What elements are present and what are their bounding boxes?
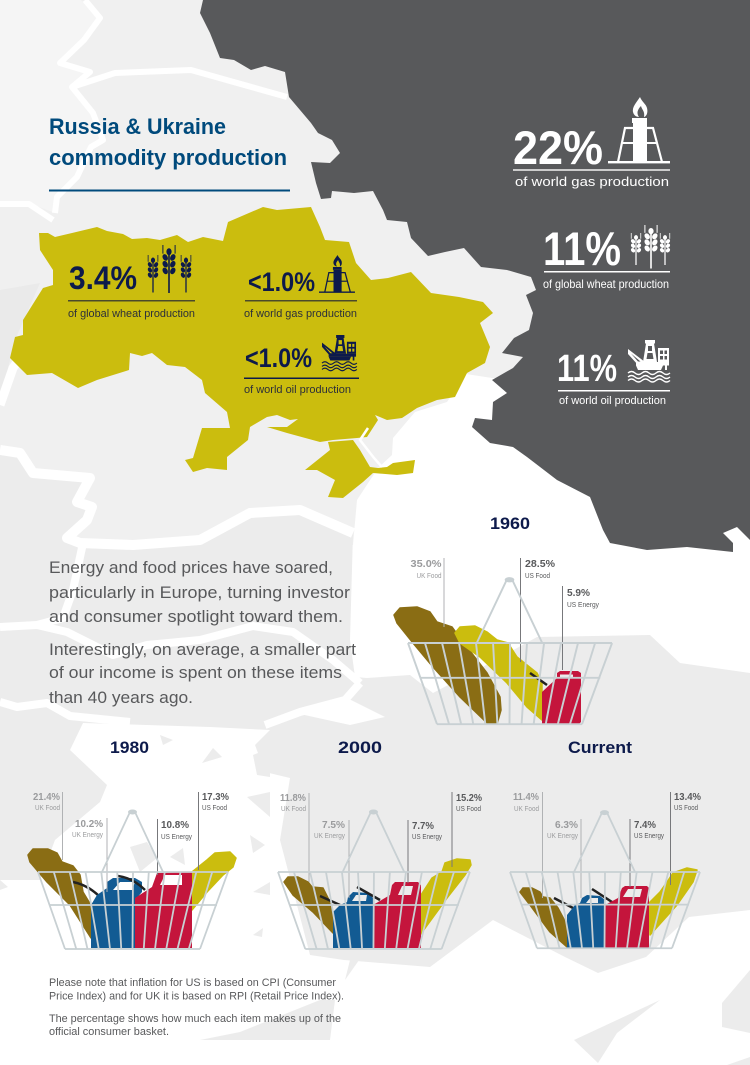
label: UK Food 11.4% (513, 791, 540, 813)
label: UK Energy 6.3%: UK Energy (547, 831, 578, 840)
stat: Ukraine wheat: of global wheat production (68, 308, 195, 320)
basket current (510, 738, 702, 948)
label: UK Food 35.0% (410, 558, 442, 580)
bread: US food (420, 859, 471, 935)
label: US Energy 10.8%: 10.8% (161, 819, 190, 831)
label: UK Energy 6.3%: 6.3% (555, 819, 579, 831)
label: UK Food 11.8% (280, 792, 307, 813)
label: UK Energy 10.2%: 10.2% (75, 818, 104, 830)
label: US Food 13.4%: 13.4% (674, 791, 702, 803)
title rule (49, 190, 290, 192)
icon: oil platform (628, 340, 670, 382)
basket 1980 (28, 738, 236, 949)
label: UK Energy 10.2% (72, 818, 104, 839)
leader lines (309, 793, 349, 898)
map: Ukraine (10, 207, 493, 498)
label: US Food 28.5%: US Food (525, 571, 550, 580)
label: UK Energy 7.5% (314, 819, 346, 840)
intro text: of our income is spent on these items (49, 663, 342, 682)
label: UK Food 11.8%: UK Food (281, 804, 306, 813)
label: US Energy 7.4%: US Energy (634, 831, 664, 840)
footnote: The percentage shows how much each item makes up of the (49, 1013, 341, 1025)
basket 1960 (394, 514, 612, 724)
bread: UK food (284, 877, 333, 933)
stat: Russia oil (557, 340, 670, 407)
label: US Energy 7.7%: US Energy (412, 832, 442, 841)
stat: Russia gas: of world gas production (515, 174, 669, 189)
footnote (49, 977, 344, 1038)
leader lines (542, 792, 581, 898)
intro text: Interestingly, on average, a smaller part (49, 640, 356, 659)
stat: Ukraine gas: of world gas production (244, 308, 357, 320)
leader lines (443, 558, 445, 627)
icon: gas flare (608, 97, 670, 163)
label: US Food 17.3% (202, 791, 230, 812)
title: commodity production (49, 145, 287, 170)
label: US Energy 5.9% (567, 587, 599, 609)
label: US Energy 5.9%: 5.9% (567, 587, 591, 599)
icon: wheat (147, 245, 192, 293)
label: US Energy 7.7%: 7.7% (412, 820, 435, 832)
label: UK Food 21.4%: 21.4% (33, 791, 61, 803)
label: US Energy 7.7% (412, 820, 442, 841)
icon: gas flare (319, 255, 355, 293)
label: US Food 17.3%: US Food (202, 803, 227, 812)
leader lines (62, 792, 107, 892)
label: US Food 15.2%: 15.2% (456, 792, 483, 804)
heading 1960: 1960 (490, 514, 530, 533)
stat: Ukraine wheat: 3.4% (69, 260, 137, 296)
label: UK Food 21.4%: UK Food (35, 803, 60, 812)
footnote: official consumer basket. (49, 1026, 169, 1038)
fuel can: UK energy (554, 895, 605, 948)
stat: Russia gas (513, 97, 670, 189)
label: US Food 13.4%: US Food (674, 803, 698, 812)
fuel can: UK energy (73, 878, 142, 948)
stat: Ukraine gas: <1.0% (248, 267, 315, 297)
intro text: Energy and food prices have soared, (49, 558, 333, 577)
intro text: than 40 years ago. (49, 688, 193, 707)
fuel can: US energy (530, 671, 581, 724)
heading 1980: 1980 (110, 738, 149, 757)
stat: Russia gas: 22% (513, 121, 603, 174)
label: UK Food 35.0%: 35.0% (410, 558, 442, 570)
stat: Russia wheat: 11% (543, 222, 621, 275)
fuel can: UK energy (320, 892, 373, 948)
footnote: Please note that inflation for US is based on CPI (Consumer (49, 977, 336, 989)
label: UK Food 35.0%: UK Food (416, 571, 442, 580)
label: UK Food 11.4%: UK Food (514, 804, 539, 813)
fuel can: US energy (118, 872, 192, 948)
label: UK Food 11.4%: 11.4% (513, 791, 540, 803)
label: US Energy 7.4% (634, 819, 664, 840)
stat: Russia wheat: of global wheat production (543, 277, 669, 291)
fuel can: US energy (357, 882, 421, 948)
label: UK Energy 7.5%: 7.5% (322, 819, 346, 831)
basket wires (408, 577, 612, 724)
label: UK Food 21.4% (33, 791, 61, 812)
footnote: Price Index) and for UK it is based on RPI (Retail Price Index). (49, 990, 344, 1002)
label: US Food 17.3%: 17.3% (202, 791, 230, 803)
bread: US food (192, 852, 236, 910)
icon: wheat (630, 225, 671, 268)
stat: Ukraine oil: of world oil production (244, 384, 351, 396)
stat: Ukraine gas (244, 255, 357, 320)
intro text: particularly in Europe, turning investor (49, 583, 350, 602)
label: US Food 15.2% (456, 792, 483, 813)
label: US Energy 10.8% (161, 819, 192, 841)
map: Russia (200, 0, 750, 552)
intro text (49, 558, 356, 707)
title (49, 114, 287, 170)
stat: Russia oil: 11% (557, 348, 617, 390)
stat: Russia oil: of world oil production (559, 395, 666, 407)
bread: UK food (28, 849, 92, 938)
basket wires (278, 810, 470, 949)
bread: UK food (394, 607, 501, 724)
heading current: Current (568, 738, 632, 757)
intro text: and consumer spotlight toward them. (49, 607, 343, 626)
label: US Energy 5.9%: US Energy (567, 600, 599, 609)
basket wires (38, 810, 228, 949)
label: US Food 28.5% (525, 558, 556, 580)
fuel can: US energy (592, 886, 649, 948)
label: UK Energy 10.2%: UK Energy (72, 830, 103, 839)
stat: Ukraine oil (244, 335, 359, 396)
label: UK Energy 7.5%: UK Energy (314, 831, 345, 840)
label: UK Food 11.8%: 11.8% (280, 792, 307, 804)
bread: US food (455, 626, 542, 720)
title: Russia & Ukraine (49, 114, 226, 139)
basket wires (510, 810, 700, 948)
stat: Russia wheat (543, 222, 671, 291)
bread: US food (649, 868, 697, 935)
label: US Energy 7.4%: 7.4% (634, 819, 657, 831)
label: US Energy 10.8%: US Energy (161, 832, 192, 841)
heading 2000: 2000 (338, 738, 382, 757)
map: Crimea (305, 440, 415, 498)
stat: Ukraine wheat (68, 245, 195, 320)
label: US Food 28.5%: 28.5% (525, 558, 556, 570)
label: UK Energy 6.3% (547, 819, 579, 840)
stat: Ukraine oil: <1.0% (245, 343, 312, 373)
basket 2000 (278, 738, 483, 949)
label: US Food 15.2%: US Food (456, 804, 481, 813)
bread: UK food (520, 888, 567, 947)
label: US Food 13.4% (674, 791, 702, 812)
icon: oil platform (322, 335, 357, 371)
